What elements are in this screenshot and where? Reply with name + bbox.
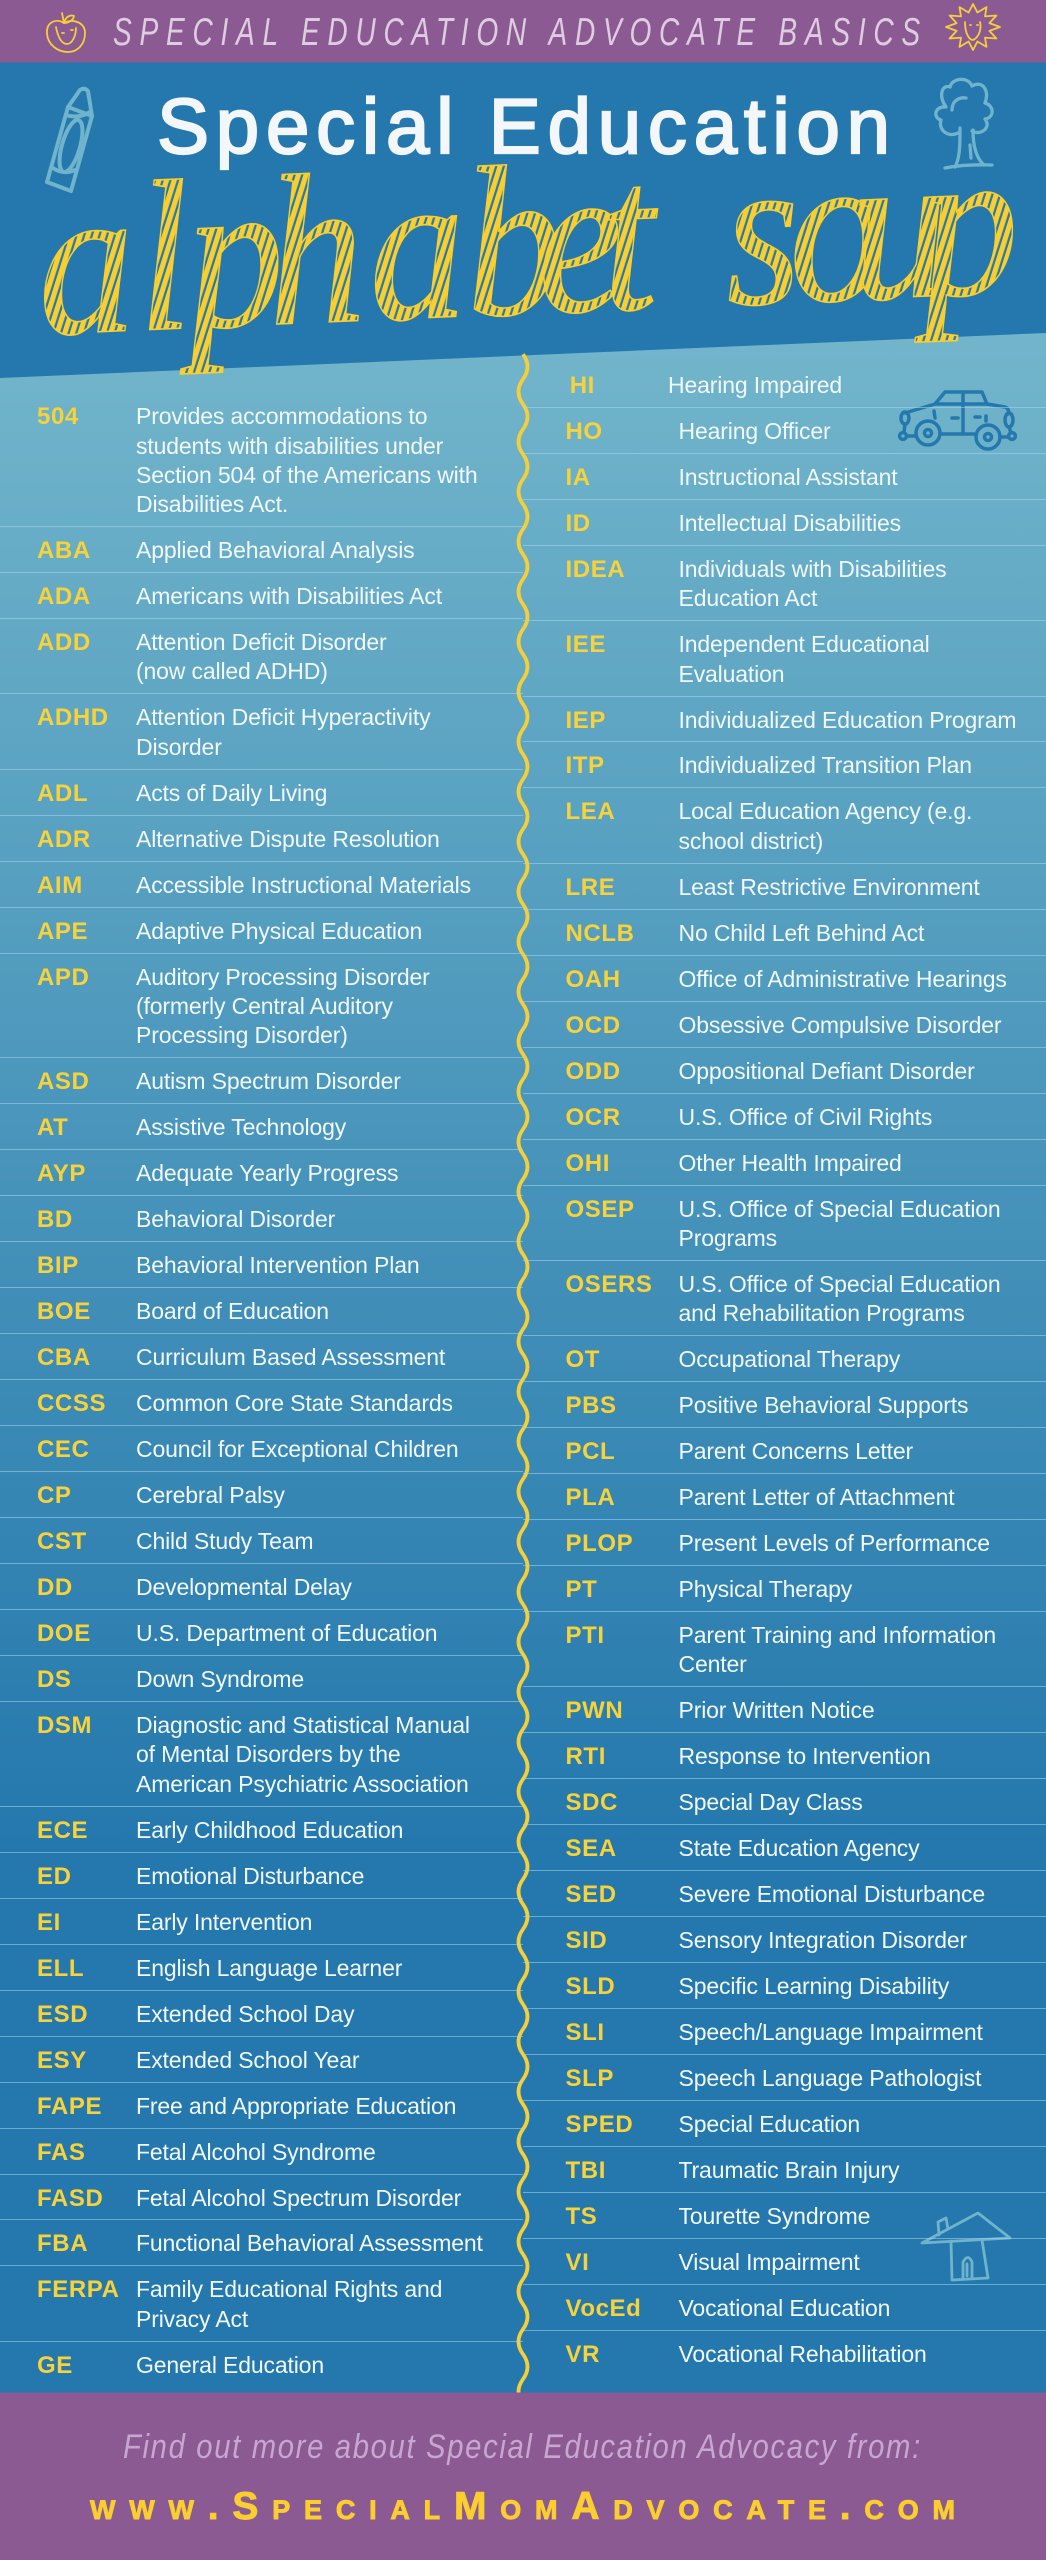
entry CBA (0, 1333, 523, 1379)
entry IEP: IEP (566, 706, 606, 734)
entry FASD: Fetal Alcohol Spectrum Disorder (136, 2184, 461, 2210)
entry DSM: American Psychiatric Association (136, 1771, 469, 1797)
entry ELL: ELL (37, 1955, 84, 1982)
entry FBA: Functional Behavioral Assessment (136, 2230, 483, 2256)
entry SDC: Special Day Class (678, 1789, 863, 1815)
entry OSEP (523, 1185, 1046, 1260)
entry CCSS: CCSS (37, 1390, 106, 1417)
entry PLOP: PLOP (566, 1530, 633, 1557)
entry APE (0, 907, 523, 953)
entry OT: Occupational Therapy (678, 1346, 900, 1372)
entry ADA (0, 572, 523, 618)
entry PTI: Center (678, 1651, 747, 1677)
entry SLI: Speech/Language Impairment (678, 2019, 983, 2045)
entry IEE: Evaluation (678, 661, 784, 687)
entry APD: (formerly Central Auditory (136, 993, 393, 1019)
entry BD (0, 1195, 523, 1241)
entry APD: Processing Disorder) (136, 1022, 348, 1048)
entry 504: Disabilities Act. (136, 491, 288, 517)
entry FERPA: Privacy Act (136, 2306, 248, 2332)
entry SID: Sensory Integration Disorder (678, 1927, 967, 1953)
entry PTI: PTI (566, 1622, 605, 1649)
entry ITP: Individualized Transition Plan (678, 752, 972, 778)
entry SED: Severe Emotional Disturbance (678, 1881, 985, 1907)
entry VI (523, 2238, 1046, 2284)
icon: apple (47, 13, 85, 52)
entry DD: Developmental Delay (136, 1574, 352, 1600)
entry OCR (523, 1093, 1046, 1139)
entry DOE: U.S. Department of Education (136, 1620, 437, 1646)
entry BOE (0, 1287, 523, 1333)
entry DS: Down Syndrome (136, 1666, 304, 1692)
entry CBA: CBA (37, 1344, 91, 1371)
entry BIP: Behavioral Intervention Plan (136, 1252, 419, 1278)
entry CEC: Council for Exceptional Children (136, 1436, 458, 1462)
entry FAPE: Free and Appropriate Education (136, 2093, 456, 2119)
entry SLP: Speech Language Pathologist (678, 2065, 981, 2091)
entry OHI (523, 1139, 1046, 1185)
entry GE (0, 2341, 523, 2387)
entry CCSS: Common Core State Standards (136, 1390, 453, 1416)
entry ODD (523, 1047, 1046, 1093)
entry ASD: ASD (37, 1068, 89, 1095)
entry 504: Provides accommodations to (136, 403, 427, 429)
entry DSM: of Mental Disorders by the (136, 1741, 401, 1767)
entry PT: Physical Therapy (678, 1576, 852, 1602)
wavy column divider (518, 354, 528, 2560)
entry AT (0, 1103, 523, 1149)
entry ESD: Extended School Day (136, 2001, 354, 2027)
entry AYP: Adequate Yearly Progress (136, 1160, 398, 1186)
entry NCLB: No Child Left Behind Act (678, 920, 924, 946)
entry IDEA: IDEA (566, 556, 625, 583)
entry BOE: BOE (37, 1298, 91, 1325)
icon: tree (936, 79, 992, 168)
entry OT: OT (566, 1346, 600, 1373)
entry LEA: LEA (566, 798, 615, 825)
entry ID (523, 499, 1046, 545)
entry IA (523, 453, 1046, 499)
entry ADR (0, 815, 523, 861)
icon: crayon (47, 89, 92, 191)
entry TBI: Traumatic Brain Injury (678, 2157, 899, 2183)
entry NCLB (523, 909, 1046, 955)
entry PLA (523, 1473, 1046, 1519)
entry DSM: DSM (37, 1712, 92, 1739)
entry ESY (0, 2036, 523, 2082)
entry VocEd: Vocational Education (678, 2295, 890, 2321)
entry OAH: Office of Administrative Hearings (678, 966, 1007, 992)
entry PCL (523, 1427, 1046, 1473)
entry OSERS: OSERS (566, 1271, 653, 1298)
entry ELL (0, 1944, 523, 1990)
footer panel (0, 2392, 1046, 2560)
entry EI: EI (37, 1909, 61, 1936)
entry TS: TS (566, 2203, 597, 2230)
entry HO: Hearing Officer (678, 418, 831, 444)
entry AIM: AIM (37, 872, 83, 899)
entry CEC: CEC (37, 1436, 89, 1463)
entry ADL: Acts of Daily Living (136, 780, 327, 806)
entry GE: General Education (136, 2352, 324, 2378)
entry ECE: ECE (37, 1817, 88, 1844)
entry LEA: school district) (678, 828, 823, 854)
entry SPED: SPED (566, 2111, 633, 2138)
entry AT: AT (37, 1114, 68, 1141)
entry ODD: ODD (566, 1058, 621, 1085)
entry PTI (523, 1611, 1046, 1686)
entry RTI (523, 1732, 1046, 1778)
entry PLOP: Present Levels of Performance (678, 1530, 990, 1556)
entry SLD: Specific Learning Disability (678, 1973, 949, 1999)
entry SED (523, 1870, 1046, 1916)
entry VocEd (523, 2284, 1046, 2330)
entry CP (0, 1471, 523, 1517)
entry SEA (523, 1824, 1046, 1870)
entry FERPA: FERPA (37, 2276, 120, 2303)
entry OCR: U.S. Office of Civil Rights (678, 1104, 932, 1130)
entry HI (523, 361, 1046, 407)
entry SLD (523, 1962, 1046, 2008)
entry IEE (523, 620, 1046, 696)
entry IA: IA (566, 464, 591, 491)
entry ADD: Attention Deficit Disorder (136, 629, 386, 655)
entry AYP: AYP (37, 1160, 86, 1187)
entry ADHD: ADHD (37, 704, 109, 731)
entry IDEA: Individuals with Disabilities (678, 556, 946, 582)
entry FBA: FBA (37, 2230, 88, 2257)
entry ABA: Applied Behavioral Analysis (136, 537, 415, 563)
entry ADL: ADL (37, 780, 88, 807)
entry LRE: LRE (566, 874, 615, 901)
entry ED: ED (37, 1863, 72, 1890)
entry ID: Intellectual Disabilities (678, 510, 901, 536)
entry OHI: OHI (566, 1150, 610, 1177)
entry ABA (0, 526, 523, 572)
entry BIP (0, 1241, 523, 1287)
entry FERPA: Family Educational Rights and (136, 2276, 442, 2302)
entry NCLB: NCLB (566, 920, 635, 947)
entry ADD: (now called ADHD) (136, 658, 328, 684)
main title line 2: alphabet soup (32, 102, 1023, 382)
entry IDEA (523, 545, 1046, 620)
entry DSM: Diagnostic and Statistical Manual (136, 1712, 470, 1738)
entry PBS: Positive Behavioral Supports (678, 1392, 968, 1418)
entry AIM: Accessible Instructional Materials (136, 872, 471, 898)
entry AT: Assistive Technology (136, 1114, 346, 1140)
entry APD: Auditory Processing Disorder (136, 964, 430, 990)
entry ADHD: Attention Deficit Hyperactivity (136, 704, 430, 730)
entry ADHD (0, 693, 523, 769)
entry OCD: OCD (566, 1012, 621, 1039)
entry TS (523, 2192, 1046, 2238)
entry HI: Hearing Impaired (668, 372, 842, 398)
entry SEA: SEA (566, 1835, 617, 1862)
entry PCL: PCL (566, 1438, 615, 1465)
footer website link: www.SpecialMomAdvocate.com (90, 2485, 955, 2528)
entry IEP (523, 696, 1046, 741)
entry LEA: Local Education Agency (e.g. (678, 798, 972, 824)
entry ED: Emotional Disturbance (136, 1863, 364, 1889)
panel: right glossary column (523, 372, 1046, 2368)
entry ADHD: Disorder (136, 734, 222, 760)
entry VR: Vocational Rehabilitation (678, 2341, 927, 2367)
entry 504: students with disabilities under (136, 433, 443, 459)
entry GE: GE (37, 2352, 73, 2379)
entry FBA (0, 2219, 523, 2265)
entry ESD (0, 1990, 523, 2036)
entry FERPA (0, 2265, 523, 2341)
entry VI: Visual Impairment (678, 2249, 860, 2275)
entry PWN: PWN (566, 1697, 623, 1724)
icon: house (922, 2213, 1010, 2280)
entry ID: ID (566, 510, 591, 537)
entry OCD: Obsessive Compulsive Disorder (678, 1012, 1001, 1038)
panel: left glossary column (0, 403, 523, 2379)
entry SLI (523, 2008, 1046, 2054)
entry OSEP: OSEP (566, 1196, 635, 1223)
entry PBS: PBS (566, 1392, 617, 1419)
entry SLP (523, 2054, 1046, 2100)
entry SLI: SLI (566, 2019, 605, 2046)
entry AYP (0, 1149, 523, 1195)
entry ODD: Oppositional Defiant Disorder (678, 1058, 975, 1084)
entry ADD: ADD (37, 629, 91, 656)
entry APE: Adaptive Physical Education (136, 918, 422, 944)
entry SEA: State Education Agency (678, 1835, 919, 1861)
entry SID: SID (566, 1927, 607, 1954)
entry PT (523, 1565, 1046, 1611)
entry TBI (523, 2146, 1046, 2192)
entry RTI: RTI (566, 1743, 606, 1770)
entry SPED (523, 2100, 1046, 2146)
entry ITP: ITP (566, 752, 605, 779)
entry PLA: Parent Letter of Attachment (678, 1484, 954, 1510)
entry ABA: ABA (37, 537, 91, 564)
entry DOE (0, 1609, 523, 1655)
entry ADL (0, 769, 523, 815)
entry DSM (0, 1701, 523, 1806)
entry SPED: Special Education (678, 2111, 860, 2137)
entry ADD (0, 618, 523, 693)
entry ESD: ESD (37, 2001, 88, 2028)
entry ELL: English Language Learner (136, 1955, 402, 1981)
entry OCR: OCR (566, 1104, 621, 1131)
entry OAH (523, 955, 1046, 1001)
entry VR: VR (566, 2341, 600, 2368)
main title line 1: Special Education (157, 82, 890, 170)
entry CST: Child Study Team (136, 1528, 313, 1554)
entry HO: HO (566, 418, 603, 445)
entry APD: APD (37, 964, 89, 991)
icon: sun (946, 4, 1000, 50)
entry EI (0, 1898, 523, 1944)
entry VocEd: VocEd (566, 2295, 641, 2322)
entry TBI: TBI (566, 2157, 606, 2184)
entry IA: Instructional Assistant (678, 464, 898, 490)
entry OHI: Other Health Impaired (678, 1150, 902, 1176)
entry CCSS (0, 1379, 523, 1425)
banner heading: SPECIAL EDUCATION ADVOCATE BASICS (113, 11, 920, 54)
entry FAS: FAS (37, 2139, 85, 2166)
entry PWN (523, 1686, 1046, 1732)
entry BOE: Board of Education (136, 1298, 329, 1324)
entry PBS (523, 1381, 1046, 1427)
entry CST (0, 1517, 523, 1563)
entry OSEP: U.S. Office of Special Education (678, 1196, 1001, 1222)
entry 504 (0, 392, 523, 526)
entry ITP (523, 741, 1046, 787)
entry BD: Behavioral Disorder (136, 1206, 335, 1232)
top banner (0, 0, 1046, 62)
entry LRE (523, 863, 1046, 909)
entry HO (523, 407, 1046, 453)
entry OCD (523, 1001, 1046, 1047)
entry LRE: Least Restrictive Environment (678, 874, 980, 900)
entry IEE: IEE (566, 631, 606, 658)
entry BIP: BIP (37, 1252, 79, 1279)
entry DD (0, 1563, 523, 1609)
entry FASD (0, 2174, 523, 2219)
footer lead-in text: Find out more about Special Education Advocacy from: (123, 2427, 920, 2466)
entry PWN: Prior Written Notice (678, 1697, 874, 1723)
entry IDEA: Education Act (678, 585, 817, 611)
entry APE: APE (37, 918, 88, 945)
entry OSERS (523, 1260, 1046, 1335)
entry PTI: Parent Training and Information (678, 1622, 996, 1648)
entry OSEP: Programs (678, 1225, 777, 1251)
entry ADR: Alternative Dispute Resolution (136, 826, 440, 852)
entry FAPE: FAPE (37, 2093, 102, 2120)
entry CEC (0, 1425, 523, 1471)
entry SDC: SDC (566, 1789, 618, 1816)
entry OT (523, 1335, 1046, 1381)
entry ECE (0, 1806, 523, 1852)
entry IEE: Independent Educational (678, 631, 930, 657)
entry ECE: Early Childhood Education (136, 1817, 403, 1843)
entry 504: 504 (37, 403, 79, 430)
entry OSERS: U.S. Office of Special Education (678, 1271, 1001, 1297)
icon: car (900, 392, 1015, 449)
entry VR (523, 2330, 1046, 2376)
entry RTI: Response to Intervention (678, 1743, 931, 1769)
entry SLP: SLP (566, 2065, 614, 2092)
entry OAH: OAH (566, 966, 621, 993)
entry TS: Tourette Syndrome (678, 2203, 870, 2229)
entry 504: Section 504 of the Americans with (136, 462, 478, 488)
entry FAPE (0, 2082, 523, 2128)
entry SID (523, 1916, 1046, 1962)
entry FASD: FASD (37, 2184, 103, 2212)
entry ESY: ESY (37, 2047, 87, 2074)
header panel (0, 60, 1046, 378)
entry CBA: Curriculum Based Assessment (136, 1344, 445, 1370)
entry ASD: Autism Spectrum Disorder (136, 1068, 401, 1094)
entry OSERS: and Rehabilitation Programs (678, 1300, 965, 1326)
entry ASD (0, 1057, 523, 1103)
entry ADA: Americans with Disabilities Act (136, 583, 442, 609)
entry FAS (0, 2128, 523, 2174)
entry FAS: Fetal Alcohol Syndrome (136, 2139, 376, 2165)
entry DS (0, 1655, 523, 1701)
entry HI: HI (570, 372, 595, 399)
entry DD: DD (37, 1574, 73, 1601)
entry ADA: ADA (37, 583, 91, 610)
entry ESY: Extended School Year (136, 2047, 359, 2073)
entry SED: SED (566, 1881, 617, 1908)
entry CP: CP (37, 1482, 72, 1509)
entry IEP: Individualized Education Program (678, 706, 1016, 732)
entry CST: CST (37, 1528, 87, 1555)
entry AIM (0, 861, 523, 907)
entry APD (0, 953, 523, 1057)
entry ED (0, 1852, 523, 1898)
entry PLOP (523, 1519, 1046, 1565)
entry PT: PT (566, 1576, 597, 1603)
entry PCL: Parent Concerns Letter (678, 1438, 913, 1464)
entry VI: VI (566, 2249, 589, 2276)
entry BD: BD (37, 1206, 73, 1233)
entry CP: Cerebral Palsy (136, 1482, 285, 1508)
entry ADR: ADR (37, 826, 91, 853)
entry LEA (523, 787, 1046, 863)
entry SLD: SLD (566, 1973, 615, 2000)
entry EI: Early Intervention (136, 1909, 312, 1935)
entry DS: DS (37, 1666, 72, 1693)
entry SDC (523, 1778, 1046, 1824)
entry PLA: PLA (566, 1484, 615, 1511)
entry DOE: DOE (37, 1620, 91, 1647)
